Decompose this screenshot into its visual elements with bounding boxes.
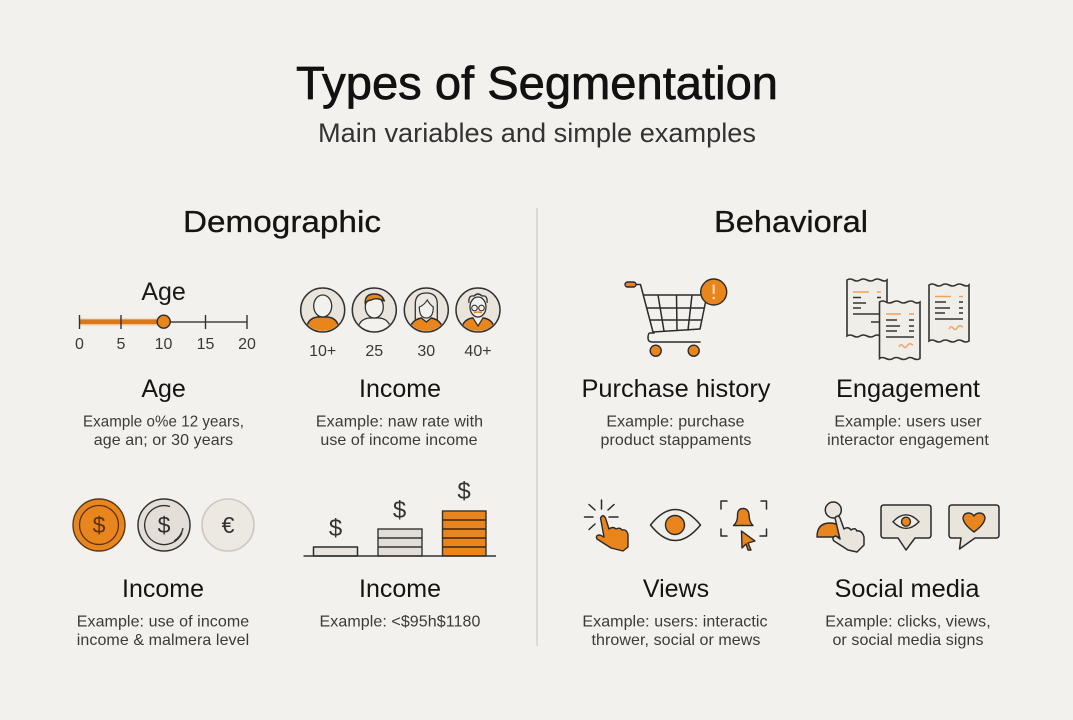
icon: eye xyxy=(650,510,700,540)
heading: views: Views xyxy=(643,575,709,603)
heading: purchase history: Purchase history xyxy=(582,375,771,403)
heading: engagement: Engagement xyxy=(836,375,980,403)
panel: social media xyxy=(817,502,999,649)
labels: age groups xyxy=(309,343,492,360)
labels: age groups: 10+ xyxy=(309,343,336,360)
heading: behavioral: Behavioral xyxy=(714,204,868,239)
labels: age groups: 25 xyxy=(365,343,383,360)
text: engagement example: Example: users user xyxy=(834,414,982,430)
panel: income coins xyxy=(73,499,254,649)
icon: euro coin: € xyxy=(222,512,235,538)
icon: eye speech bubble xyxy=(881,505,931,550)
text: income example: income & malmera level xyxy=(77,632,249,649)
icon: person 25 xyxy=(352,288,396,332)
receipt 2 xyxy=(880,301,920,360)
text: purchase example: Example: purchase xyxy=(606,414,745,430)
title: Types of Segmentation xyxy=(296,57,778,109)
labels: age groups: 30 xyxy=(417,343,435,360)
panel: views xyxy=(582,500,768,649)
infographic xyxy=(72,65,1000,648)
icon: heart speech bubble xyxy=(949,505,999,549)
receipt 1 xyxy=(847,279,887,337)
text: engagement example: interactor engagement xyxy=(827,432,989,449)
chart: stacked income bars xyxy=(304,478,496,556)
text: social media example: Example: clicks, views, xyxy=(825,614,991,630)
chart: stacked income bars: $ xyxy=(393,497,406,524)
chart: age scale: 0 xyxy=(75,336,84,353)
text: views example: Example: users: interactic xyxy=(582,614,768,630)
chart: age scale: 5 xyxy=(117,336,126,353)
text: age example: Example o%e 12 years, xyxy=(83,414,244,430)
panel: purchase history xyxy=(582,279,771,449)
icon: person 30 xyxy=(404,288,448,332)
panel: income bars xyxy=(304,478,496,630)
heading: income: Income xyxy=(122,575,204,603)
heading: income: Income xyxy=(359,575,441,603)
icon: shopping cart with alert xyxy=(625,279,727,356)
icon: person 10+ xyxy=(301,288,345,332)
text: income example: Example: naw rate with xyxy=(316,414,483,430)
chart: age scale: 10 xyxy=(155,336,172,353)
chart: stacked income bars: $ xyxy=(329,515,342,542)
icon: person 40+ xyxy=(456,288,500,332)
heading: income: Income xyxy=(359,375,441,403)
panel: income people xyxy=(301,288,500,449)
receipt 3 xyxy=(929,284,969,342)
text: income example: Example: use of income xyxy=(77,614,249,630)
icon: orange dollar coin xyxy=(73,499,125,551)
icon: euro coin xyxy=(202,499,254,551)
icon: grey dollar coin xyxy=(138,499,190,551)
icon: grey dollar coin: $ xyxy=(158,512,171,538)
icon: receipts xyxy=(847,279,969,360)
text: purchase example: product stappaments xyxy=(601,432,751,449)
heading: social media: Social media xyxy=(834,575,980,603)
text: income example: use of income income xyxy=(320,432,478,449)
subtitle: Main variables and simple examples xyxy=(318,118,756,148)
heading: age: Age xyxy=(141,375,186,403)
icon: bell with cursor xyxy=(721,501,766,550)
icon: clicking hand xyxy=(584,500,628,551)
text: age example: age an; or 30 years xyxy=(94,432,233,449)
panel: age xyxy=(75,278,256,449)
chart: stacked income bars: $ xyxy=(457,478,471,505)
chart: age scale xyxy=(75,278,256,353)
chart: age scale: Age xyxy=(141,278,186,306)
heading: demographic: Demographic xyxy=(183,204,381,239)
text: social media example: or social media signs xyxy=(832,632,984,649)
chart: age scale: 15 xyxy=(197,336,214,353)
chart: age scale: 20 xyxy=(238,336,256,353)
icon: person with hand xyxy=(817,502,864,552)
text: income range example: Example: <$95h$1180 xyxy=(320,614,480,630)
labels: age groups: 40+ xyxy=(464,343,492,360)
icon: orange dollar coin: $ xyxy=(93,512,106,538)
panel: engagement xyxy=(827,279,989,449)
text: views example: thrower, social or mews xyxy=(591,632,761,649)
